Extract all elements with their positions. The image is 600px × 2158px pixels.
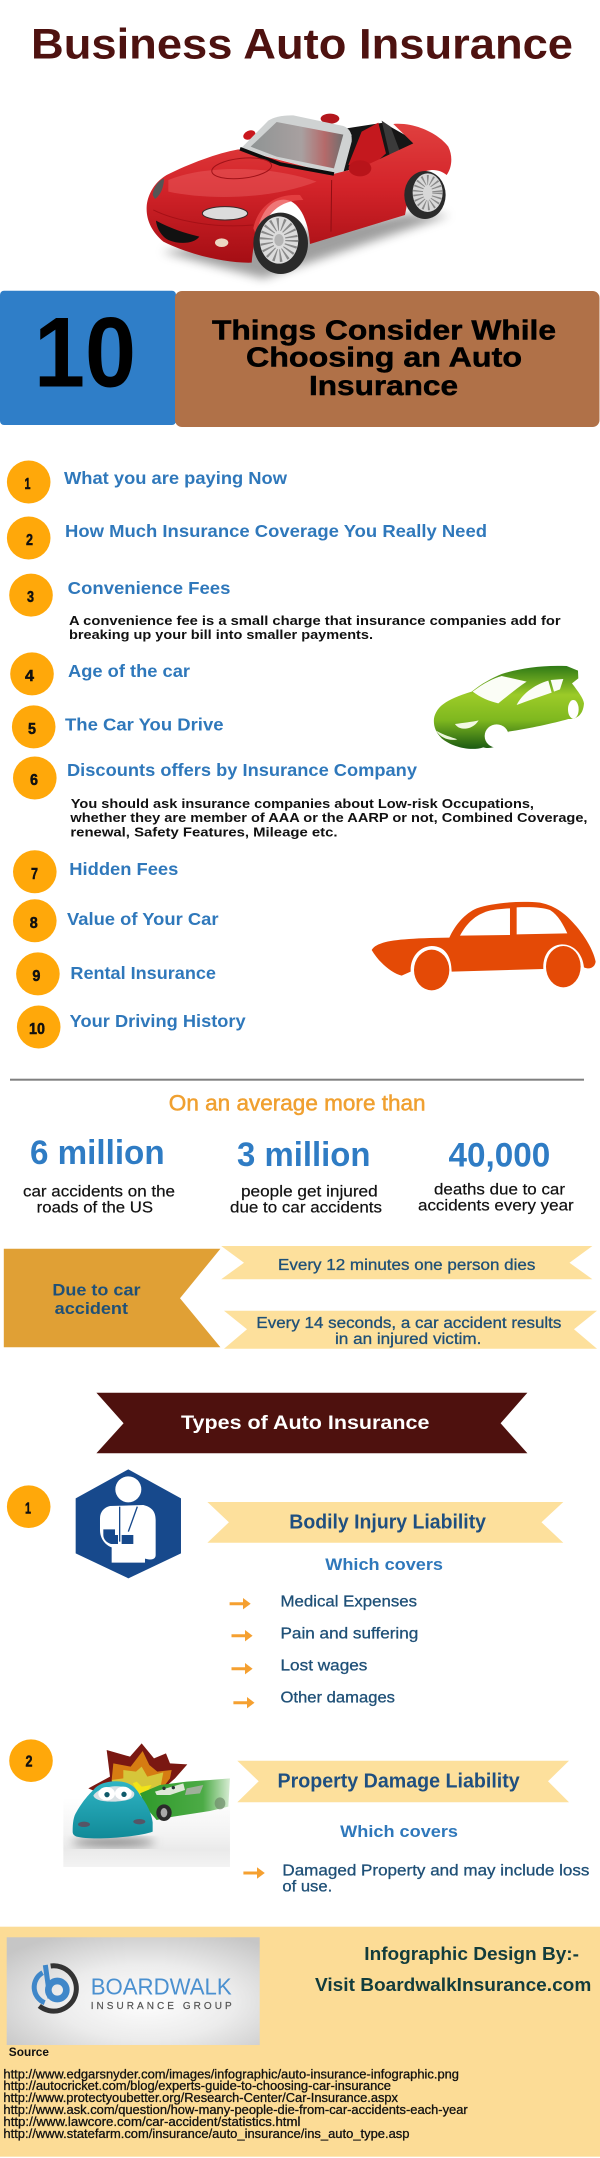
item 3 with description: A convenience fee is a small charge that insurance companies add for: [69, 613, 561, 628]
stat: 6 million: car accidents on the: [23, 1184, 175, 1201]
subheading: which covers: Which covers: [325, 1555, 443, 1574]
subheading: which covers: Which covers: [340, 1822, 458, 1841]
list: bodily injury coverage: Lost wages: [280, 1658, 368, 1675]
source links: http://www.statefarm.com/insurance/auto_insurance/ins_auto_type.asp: [3, 2126, 410, 2141]
source links: [3, 2066, 468, 2141]
item 5: The Car You Drive: [65, 715, 224, 735]
stat: 3 million: [230, 1136, 382, 1217]
source links: http://www.edgarsnyder.com/images/infographic/auto-insurance-infographic.png: [3, 2066, 459, 2081]
item 2: [7, 516, 487, 560]
icon: injured person hexagon: [76, 1469, 181, 1578]
illustration: car crash: [63, 1743, 230, 1867]
stat: 40,000: accidents every year: [418, 1198, 574, 1215]
design credit: Infographic Design By:-: [364, 1943, 579, 1964]
item 4: [10, 652, 190, 695]
ribbon: every 14 seconds: [224, 1311, 597, 1349]
item 10: Your Driving History: [70, 1011, 246, 1031]
item 4: Age of the car: [68, 661, 190, 681]
ribbon: bodily injury liability: Bodily Injury Liability: [289, 1512, 487, 1534]
illustration: red convertible car: [147, 114, 451, 278]
list: bodily injury coverage: Other damages: [280, 1690, 395, 1707]
title: Business Auto Insurance: [31, 20, 573, 68]
logo: Boardwalk Insurance Group: BOARDWALK: [91, 1973, 232, 1999]
item 7: [13, 850, 179, 893]
item 5: 5: [28, 721, 36, 738]
design credit: Visit BoardwalkInsurance.com: [315, 1974, 591, 1995]
item 2: How Much Insurance Coverage You Really Need: [65, 521, 487, 541]
badge: type 2: 2: [26, 1754, 33, 1771]
stat: 40,000: deaths due to car: [434, 1182, 565, 1199]
banner: types of auto insurance: [96, 1393, 527, 1453]
source links: http://www.lawcore.com/car-accident/statistics.html: [3, 2114, 301, 2129]
item 7: 7: [31, 866, 38, 883]
item 5: [12, 705, 224, 748]
item 10: 10: [29, 1021, 45, 1038]
item 6 with description: whether they are member of AAA or the AARP or not, Combined Coverage,: [69, 810, 587, 825]
arrow: [243, 1867, 265, 1879]
arrow: [232, 1663, 253, 1674]
number 10: 10: [34, 297, 136, 408]
source label: Source: [9, 2045, 49, 2059]
badge: type 2: [9, 1739, 53, 1782]
arrow: [230, 1598, 251, 1609]
list: 10 things to consider: [7, 460, 587, 1048]
badge: type 1: [7, 1485, 50, 1528]
ribbon: property damage liability: Property Damage Liability: [278, 1771, 521, 1793]
list: bodily injury coverage: Pain and suffering: [280, 1626, 418, 1643]
stat: 6 million: 6 million: [30, 1134, 165, 1172]
ribbon: property damage liability: [237, 1761, 569, 1802]
stat: 6 million: roads of the US: [37, 1200, 153, 1217]
item 9: Rental Insurance: [70, 963, 216, 983]
panel: blue number box: [0, 291, 176, 425]
list: property damage coverage: Damaged Property and may include loss: [282, 1863, 590, 1880]
item 6 with description: [13, 756, 588, 839]
item 2: 2: [26, 532, 33, 549]
source links: http://www.ask.com/question/how-many-people-die-from-car-accidents-each-year: [3, 2102, 468, 2117]
item 4: 4: [25, 668, 34, 685]
item 3 with description: breaking up your bill into smaller payments.: [69, 627, 373, 642]
list: bodily injury coverage: Medical Expenses: [280, 1594, 417, 1611]
logo: Boardwalk Insurance Group: INSURANCE GROUP: [91, 2001, 232, 2012]
design credit: [315, 1943, 591, 1995]
heading text: Insurance: [309, 370, 458, 401]
panel: due to car accident tag: Due to car: [52, 1280, 141, 1299]
banner: types of auto insurance: Types of Auto Insurance: [181, 1413, 429, 1434]
ribbon: every 12 minutes: Every 12 minutes one person dies: [278, 1257, 536, 1274]
item 8: Value of Your Car: [67, 909, 219, 929]
source links: http://autocricket.com/blog/experts-guide-to-choosing-car-insurance: [3, 2078, 391, 2093]
arrow: [232, 1630, 253, 1641]
stat: 3 million: people get injured: [241, 1184, 378, 1201]
heading text: Things Consider While: [212, 314, 556, 345]
illustration: orange car: [372, 902, 596, 990]
item 8: [13, 899, 219, 942]
logo: Boardwalk Insurance Group: [7, 1937, 260, 2045]
stat: 6 million: [23, 1134, 175, 1217]
item 3 with description: Convenience Fees: [68, 578, 231, 598]
item 10: [17, 1006, 246, 1048]
item 3 with description: [9, 574, 561, 642]
item 1: What you are paying Now: [64, 468, 287, 488]
item 9: [16, 952, 216, 995]
panel: due to car accident tag: accident: [55, 1299, 128, 1318]
stat: 3 million: due to car accidents: [230, 1200, 382, 1217]
list: property damage coverage: of use.: [282, 1879, 332, 1896]
panel: footer: [0, 1927, 600, 2157]
ribbon: every 14 seconds: in an injured victim.: [335, 1331, 481, 1348]
stat: 40,000: 40,000: [448, 1137, 550, 1175]
source links: http://www.protectyoubetter.org/Research-Center/Car-Insurance.aspx: [3, 2090, 398, 2105]
item 6 with description: Discounts offers by Insurance Company: [67, 760, 417, 780]
statistics heading: On an average more than: [169, 1091, 426, 1116]
heading text: Choosing an Auto: [246, 342, 522, 373]
item 6 with description: You should ask insurance companies about Low-risk Occupations,: [71, 796, 534, 811]
panel: brown heading box: [175, 291, 600, 427]
item 6 with description: renewal, Safety Features, Mileage etc.: [70, 824, 338, 839]
list: property damage coverage: [243, 1863, 590, 1896]
item 1: 1: [24, 476, 31, 493]
item 3 with description: 3: [27, 589, 34, 606]
stat: 40,000: [418, 1137, 574, 1215]
ribbon: every 12 minutes: [221, 1246, 592, 1279]
item 7: Hidden Fees: [69, 859, 179, 879]
item 9: 9: [32, 968, 40, 985]
list: bodily injury coverage: [230, 1594, 418, 1708]
panel: due to car accident tag: [4, 1249, 220, 1347]
divider line: [10, 1079, 584, 1081]
item 1: [7, 460, 287, 504]
heading text: [212, 314, 556, 401]
badge: type 1: 1: [25, 1500, 31, 1517]
arrow: [233, 1697, 254, 1708]
ribbon: bodily injury liability: [207, 1502, 563, 1543]
ribbon: every 14 seconds: Every 14 seconds, a car accident results: [256, 1315, 562, 1332]
item 8: 8: [30, 915, 38, 932]
illustration: green car: [434, 666, 584, 749]
item 6 with description: 6: [30, 772, 38, 789]
stat: 3 million: 3 million: [237, 1136, 370, 1174]
